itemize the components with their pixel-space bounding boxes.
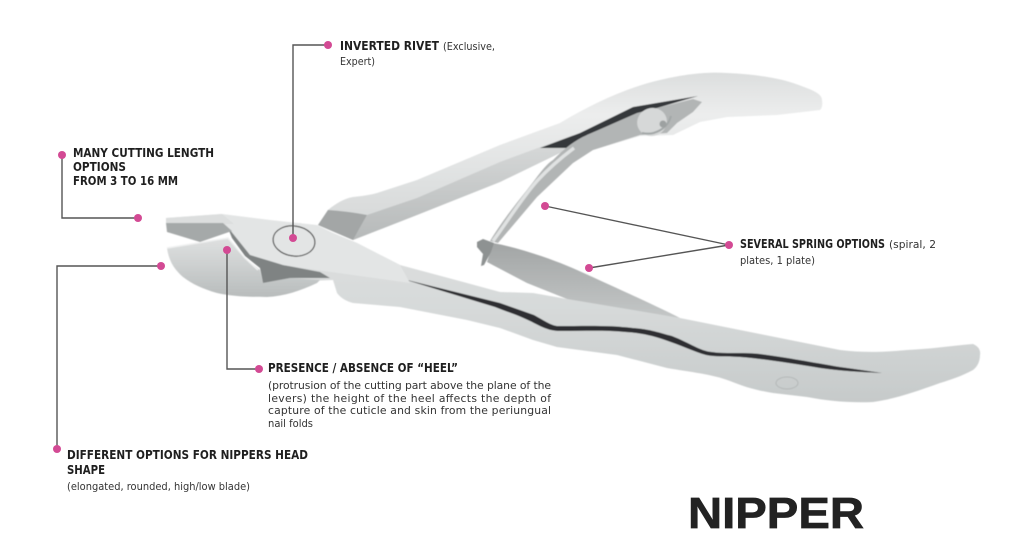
- callout: inverted rivet: [289, 39, 495, 242]
- lower jaw: [167, 238, 320, 297]
- spring: highlight strip: [493, 148, 574, 241]
- dark slot: [540, 96, 698, 148]
- nipper head: [166, 214, 410, 297]
- upper lever face: [166, 214, 410, 283]
- callout: inverted rivet: (Exclusive,: [443, 40, 495, 53]
- callout: spring options: SEVERAL SPRING OPTIONS: [740, 237, 885, 251]
- callout: spring options: (spiral, 2: [889, 238, 936, 251]
- spring rivet tip: [477, 239, 494, 266]
- callout: head shape: [53, 262, 308, 493]
- upper handle: [318, 73, 822, 240]
- callout: inverted rivet: Expert): [340, 55, 375, 68]
- callout: head shape: DIFFERENT OPTIONS FOR NIPPERS HEAD: [67, 448, 308, 462]
- callout: heel: capture of the cuticle and skin from the periungual: [268, 404, 551, 417]
- upper jaw bevel: [166, 214, 234, 224]
- callout: cutting length: OPTIONS: [73, 160, 126, 174]
- upper jaw cutting face: [166, 223, 232, 242]
- callout: heel: nail folds: [268, 417, 313, 430]
- nipper tool illustration: [166, 73, 980, 402]
- end facet: [318, 210, 367, 240]
- lower face of upper handle: [353, 135, 590, 240]
- dark gap behind the heel: [228, 228, 330, 283]
- lower handle: [262, 223, 980, 402]
- callout: cutting length: [58, 146, 214, 222]
- inverted rivet ellipse: [271, 223, 317, 259]
- callout: heel: [223, 246, 551, 430]
- callout: heel: levers) the height of the heel affects the depth of: [268, 392, 551, 405]
- callout: spring options: [541, 202, 936, 272]
- callout: head shape: SHAPE: [67, 463, 105, 477]
- callout: cutting length: MANY CUTTING LENGTH: [73, 146, 214, 160]
- callout: cutting length: FROM 3 TO 16 MM: [73, 174, 178, 188]
- rivet mark: [776, 377, 798, 389]
- callout: heel: PRESENCE / ABSENCE OF “HEEL”: [268, 361, 458, 375]
- spring screw: [633, 104, 671, 140]
- spring: upper plate: [490, 99, 702, 243]
- spring: lower plate: [487, 243, 680, 318]
- title: NIPPER: [688, 489, 864, 538]
- callout: inverted rivet: INVERTED RIVET: [340, 39, 440, 53]
- callout: heel: (protrusion of the cutting part above the plane of the: [268, 379, 551, 392]
- callout: spring options: plates, 1 plate): [740, 254, 815, 267]
- callout: head shape: (elongated, rounded, high/low blade): [67, 480, 250, 493]
- dark slot line: [403, 279, 882, 373]
